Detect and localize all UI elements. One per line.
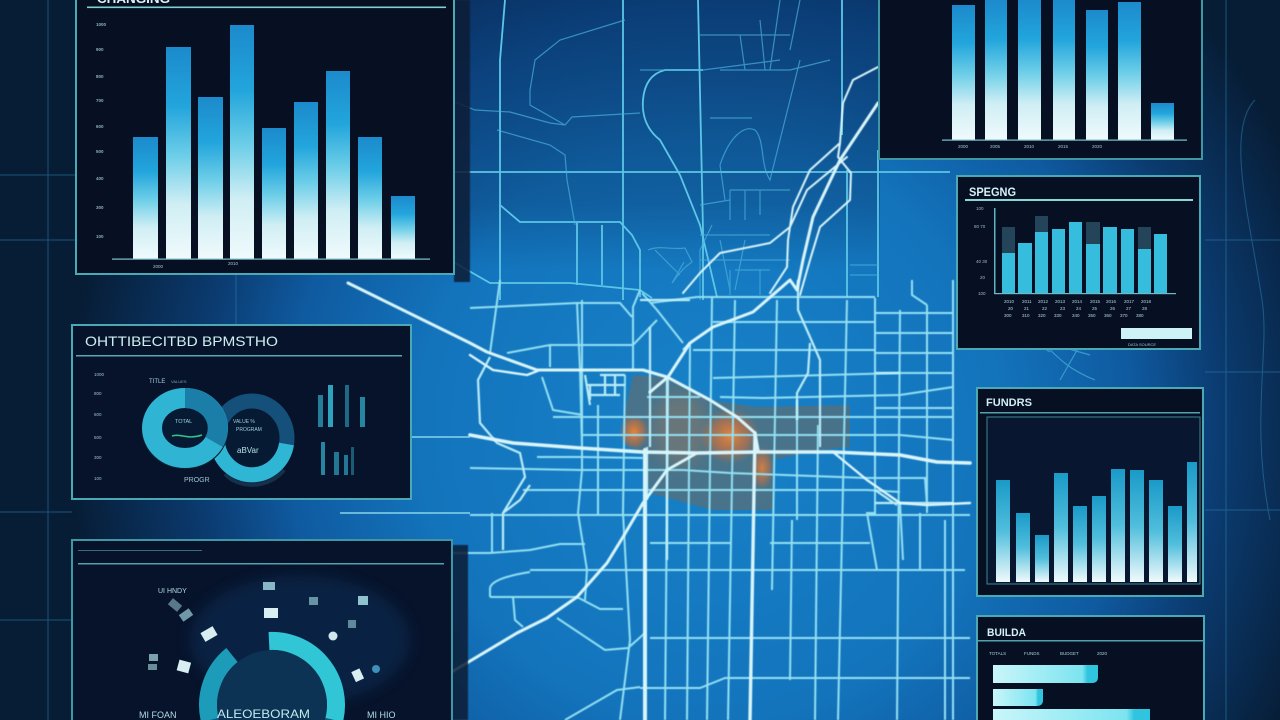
x axis labels: 380	[1136, 313, 1144, 318]
x axis labels: 20	[1008, 306, 1014, 311]
x axis labels: 330	[1054, 313, 1062, 318]
column labels	[989, 651, 1108, 656]
y axis labels: 20	[980, 275, 986, 280]
x axis labels: 2013	[1055, 299, 1066, 304]
footnote: DATA SOURCE	[1128, 342, 1156, 347]
x axis labels: 24	[1076, 306, 1082, 311]
donut 2: PROGRAM	[236, 427, 262, 433]
x axis labels	[1004, 299, 1152, 318]
panel: top-right bar chart	[879, 0, 1202, 159]
x axis labels: 2005	[990, 144, 1001, 149]
inner chart frame	[987, 417, 1200, 584]
vertical spike charts	[318, 385, 365, 475]
panel: BUILDA horizontal bars	[977, 616, 1204, 720]
y axis labels	[974, 206, 988, 296]
y axis labels: 800	[96, 74, 104, 79]
y axis labels: 300	[96, 205, 104, 210]
donut 2 text: VALUE %	[233, 419, 255, 425]
x axis labels: 300	[1004, 313, 1012, 318]
northern thin roads	[450, 0, 1095, 380]
left labels: 100	[94, 476, 102, 481]
bottom caption: PROGR	[184, 477, 210, 484]
x axis labels: 2010	[1024, 144, 1035, 149]
left labels: 500	[94, 435, 102, 440]
stacked dark bar tops	[1002, 216, 1151, 253]
panel: radial chart	[72, 540, 452, 720]
x axis labels: 360	[1104, 313, 1112, 318]
bars	[1002, 222, 1167, 293]
left labels: 300	[94, 455, 102, 460]
x axis labels: 26	[1110, 306, 1116, 311]
x axis labels: 23	[1060, 306, 1066, 311]
x axis labels: 2012	[1038, 299, 1049, 304]
x axis labels: 2011	[1022, 299, 1032, 304]
y axis labels: 100	[976, 206, 984, 211]
ring inner disc	[217, 650, 327, 720]
x axis labels: 2016	[1106, 299, 1117, 304]
x axis labels: 370	[1120, 313, 1128, 318]
x axis labels: 2000	[958, 144, 969, 149]
panel: OPTIMIZED BRANDING donuts: VALUES	[171, 379, 187, 384]
column labels: 2020	[1097, 651, 1108, 656]
left labels: 600	[94, 412, 102, 417]
y axis labels: 900	[96, 47, 104, 52]
ring captions: MI FOAN	[139, 710, 176, 720]
street grid	[450, 280, 970, 720]
column labels: TOTALS	[989, 651, 1006, 656]
map: central street network	[340, 0, 1095, 720]
panel heading: BUILDA	[987, 627, 1026, 639]
ring captions: MI HIO	[367, 710, 396, 720]
x axis labels: 340	[1072, 313, 1080, 318]
legend bar	[1121, 328, 1192, 339]
bars	[996, 462, 1197, 582]
y axis labels: 100	[96, 234, 104, 239]
x axis labels: 2000	[153, 264, 164, 269]
x axis labels: 22	[1042, 306, 1048, 311]
left labels: 800	[94, 391, 102, 396]
donut 2	[217, 401, 287, 485]
small donut caption: TITLE	[149, 379, 165, 385]
y axis labels: 80 70	[974, 224, 986, 229]
x axis labels: 320	[1038, 313, 1046, 318]
column labels: FUNDS	[1024, 651, 1040, 656]
x axis labels: 27	[1126, 306, 1132, 311]
x axis labels: 310	[1022, 313, 1030, 318]
panel: OPTIMIZED BRANDING donuts	[72, 325, 411, 499]
panel heading: SPEGNG	[969, 187, 1016, 199]
surrounding markers	[148, 582, 380, 682]
bars	[993, 665, 1150, 720]
y axis labels: 1000	[96, 22, 107, 27]
panel heading: FUNDRS	[986, 397, 1032, 409]
y axis labels	[96, 22, 107, 239]
y axis labels: 400	[96, 176, 104, 181]
donut 2: aBVar	[237, 446, 259, 455]
ring captions	[139, 588, 396, 720]
x axis labels	[958, 144, 1103, 149]
x axis labels: 28	[1142, 306, 1148, 311]
bars	[133, 25, 415, 259]
left labels: 1000	[94, 372, 105, 377]
y axis labels: 500	[96, 149, 104, 154]
left labels	[94, 372, 105, 481]
panel: FUNDS bar chart	[977, 388, 1203, 596]
donut 1	[142, 393, 228, 469]
ring gauge	[208, 641, 336, 720]
x axis labels: 2010	[1004, 299, 1015, 304]
x axis labels: 2017	[1124, 299, 1135, 304]
x axis labels: 2015	[1090, 299, 1101, 304]
x axis labels: 350	[1088, 313, 1096, 318]
y axis labels: 100	[978, 291, 986, 296]
bars	[952, 0, 1174, 140]
y axis labels: 600	[96, 124, 104, 129]
bright connector lines beside panels	[340, 437, 470, 513]
ring captions: UI HNDY	[158, 588, 187, 595]
panel: SPEGNG bar chart	[957, 176, 1200, 349]
column labels: BUDGET	[1060, 651, 1079, 656]
x axis labels: 21	[1024, 306, 1030, 311]
northern roads	[450, 0, 950, 300]
panel heading: OHTTIBECITBD BPMSTHO	[85, 333, 278, 349]
x axis labels: 25	[1092, 306, 1098, 311]
y axis labels: 700	[96, 98, 104, 103]
x axis labels: 2018	[1141, 299, 1152, 304]
x axis labels: 2014	[1072, 299, 1083, 304]
major highways	[348, 67, 970, 720]
y axis labels: 40 30	[976, 259, 988, 264]
western ring road	[478, 280, 953, 560]
x axis labels: 2020	[1092, 144, 1103, 149]
x axis labels: 2015	[1058, 144, 1069, 149]
downtown heat zone	[619, 375, 850, 510]
panel: top-left bar chart	[76, 0, 454, 274]
panel: top-left bar chart: 2010	[228, 261, 239, 266]
donut 1 text: TOTAL	[175, 419, 192, 425]
panel shadow bands	[452, 0, 470, 720]
